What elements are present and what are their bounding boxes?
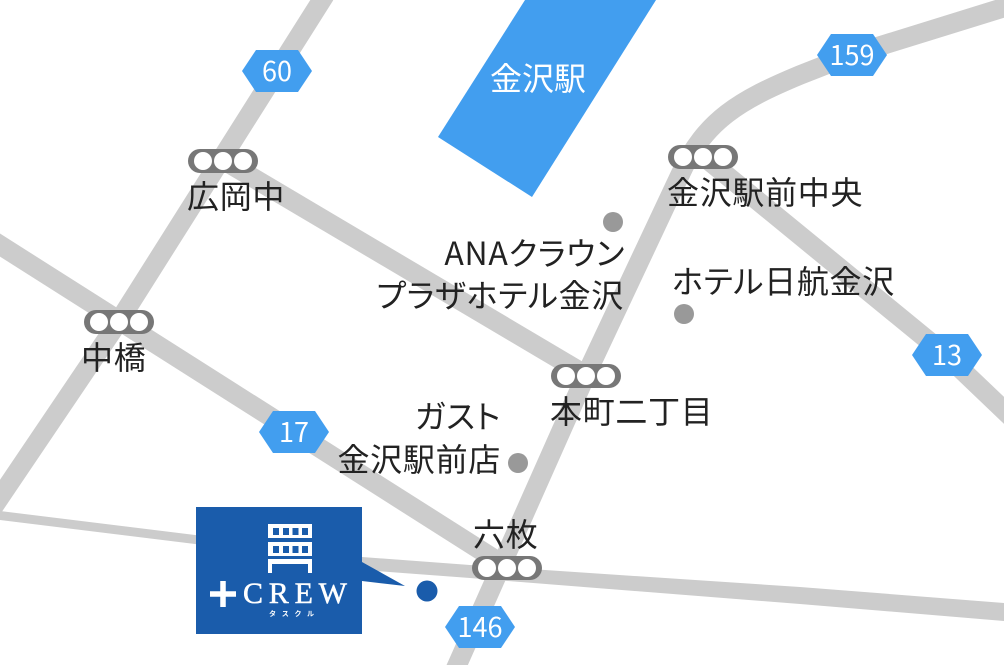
label: Honmachi 2-chome: 本町二丁目: [550, 387, 714, 433]
signal: Hirooka-naka: [188, 149, 258, 173]
landmark: ANA Crowne Plaza: プラザホテル金沢: [377, 271, 624, 317]
route badge 159: 159: [830, 34, 874, 73]
route badge 60: [242, 50, 312, 92]
signal: Rokumai: [472, 556, 542, 580]
landmark: Gusto: 金沢駅前店: [337, 435, 501, 481]
landmark: ANA Crowne Plaza: [377, 212, 625, 317]
route badge 146: [445, 606, 515, 648]
route badge 60: 60: [262, 50, 292, 89]
callout: +CREW: [196, 507, 405, 634]
route badge 13: 13: [932, 334, 962, 373]
route badge 159: [817, 34, 887, 76]
logo kana: タスクル: [269, 609, 314, 619]
label: Kanazawa-ekimae-chuo: 金沢駅前中央: [667, 168, 863, 214]
icon: building: [268, 524, 312, 573]
logo: plus sign: [210, 581, 236, 607]
label: Hirooka-naka: 広岡中: [187, 172, 285, 218]
landmark: Gusto: [337, 392, 528, 481]
route badge 146: 146: [458, 606, 502, 645]
landmark: ANA Crowne Plaza: ANAクラウン: [444, 229, 625, 275]
location marker: [416, 580, 438, 602]
label: Nakabashi: 中橋: [81, 333, 146, 379]
signal: Kanazawa-ekimae-chuo: [668, 145, 738, 169]
station: Kanazawa Station: [438, 0, 656, 197]
station: Kanazawa Station: 金沢駅: [490, 54, 586, 100]
logo text: CREW: [243, 577, 348, 610]
landmark: Hotel Nikko Kanazawa: [672, 257, 895, 324]
landmark: Gusto: ガスト: [415, 392, 501, 438]
route badge 13: [912, 334, 982, 376]
label: Rokumai: 六枚: [473, 510, 538, 556]
signal: Nakabashi: [84, 310, 154, 334]
landmark: Hotel Nikko Kanazawa: ホテル日航金沢: [672, 257, 895, 303]
route badge 17: [259, 411, 329, 453]
signal: Honmachi 2-chome: [551, 364, 621, 388]
route badge 17: 17: [279, 411, 309, 450]
